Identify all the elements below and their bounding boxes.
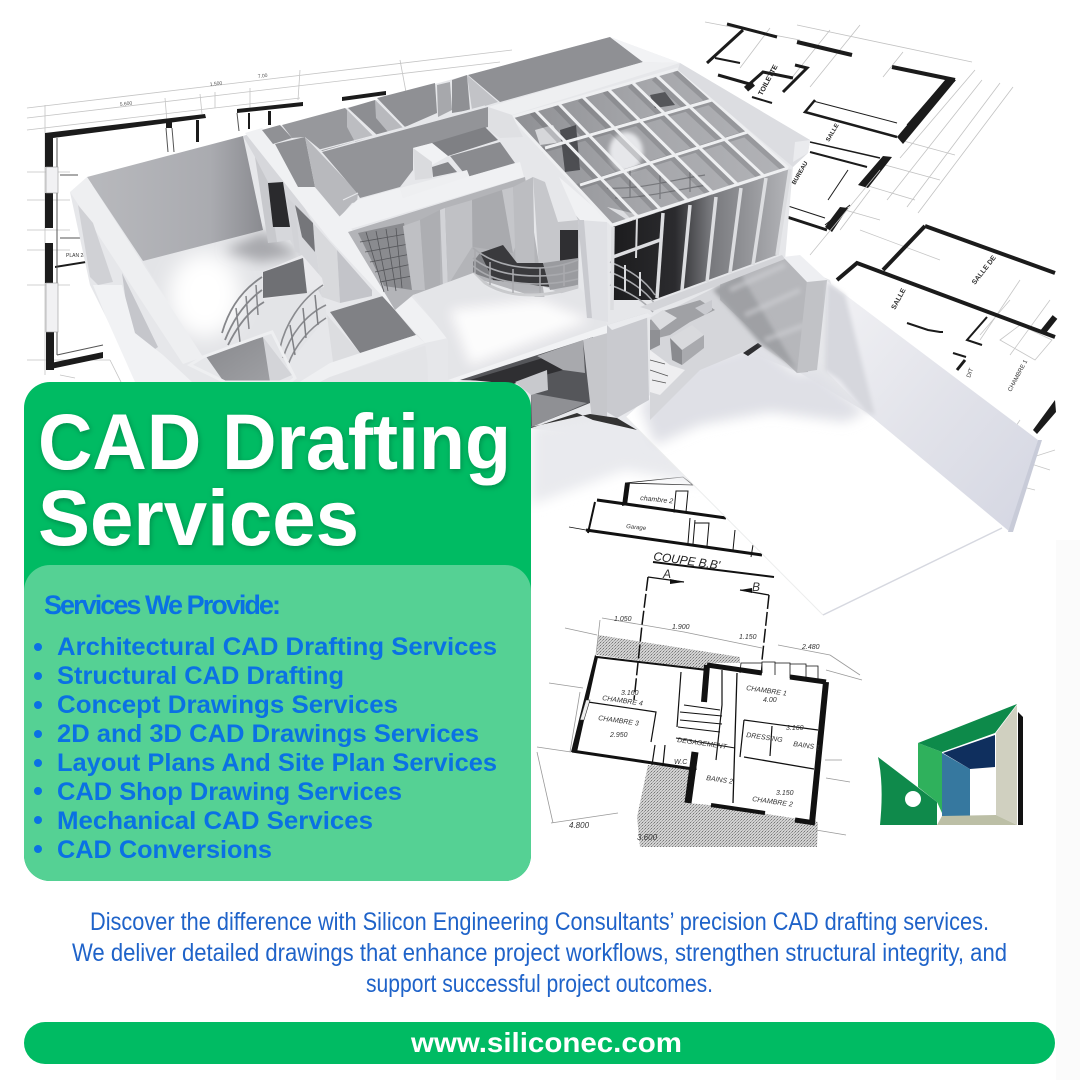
back rooms (262, 37, 680, 217)
blueprint: floor plan: 3.150 (776, 790, 794, 797)
blueprint: floor plan: DRESSING (746, 732, 783, 744)
blueprint: floor plan: 3.160 (786, 725, 804, 732)
icon: company logo (878, 704, 1023, 825)
blueprint: floor plan: CHAMBRE 3 (598, 715, 639, 728)
blueprint: right plan: SALLE DE (971, 254, 998, 286)
bullet list: Architectural CAD Drafting Services (57, 633, 497, 661)
title (38, 397, 511, 562)
blueprint: floor plan: CHAMBRE 4 (602, 695, 643, 708)
blueprint: right plan (810, 170, 1056, 490)
blueprint: right plan: CHAMBRE 1 (1007, 359, 1030, 393)
blueprint: top left plan (27, 50, 512, 400)
blueprint: floor plan: 1.900 (672, 624, 690, 631)
blueprint: top right plan: SALLE (826, 123, 841, 143)
bullet list: Layout Plans And Site Plan Services (57, 749, 497, 777)
lower centre rooms (298, 296, 448, 383)
blueprint: right plan: DIT (966, 367, 975, 379)
blueprint: top left plan: 1.500 (210, 80, 223, 88)
right block (607, 313, 652, 418)
bullet list: Concept Drawings Services (57, 691, 398, 719)
frame shadows (532, 71, 785, 219)
long right wall (825, 281, 1042, 532)
blueprint: floor plan: 4.00 (763, 697, 777, 704)
curved balcony (473, 245, 578, 295)
blueprint: floor plan: 2.950 (609, 732, 628, 739)
blueprint: floor plan: W.C (674, 759, 688, 766)
top and right bands of roof frame (488, 62, 810, 167)
left wall top and side faces (70, 177, 203, 364)
title: Services (38, 473, 359, 562)
paper floor and white sheet (531, 340, 1010, 615)
blueprint: floor plan (537, 567, 862, 847)
blueprint: top right plan (705, 22, 1013, 232)
blueprint: floor plan: 1.150 (739, 634, 757, 641)
blueprint: floor plan: 3.600 (637, 833, 658, 842)
blueprint: floor plan: 4.800 (569, 821, 590, 830)
blueprint: section B-B: COUPE B.B' (653, 549, 722, 572)
title: CAD Drafting (38, 397, 511, 486)
front pillar (578, 220, 608, 322)
panel: services list (24, 565, 531, 881)
description paragraph: support successful project outcomes. (366, 970, 713, 998)
blueprint: floor plan: BAINS 1 (793, 741, 820, 752)
blueprint: floor plan: DEGAGEMENT (677, 737, 728, 751)
blueprint: top left plan: 5.600 (120, 100, 133, 108)
panel: title card (24, 382, 531, 881)
lower small room (205, 337, 272, 382)
inner rear wall (713, 255, 827, 373)
atrium wall with columns (348, 177, 612, 310)
main floor slab (413, 273, 610, 382)
blueprint: top left plan: 7.00 (258, 73, 268, 80)
curved stair wall and railings (262, 255, 324, 300)
blueprint: floor plan: 3.160 (621, 690, 639, 697)
building footprint (70, 37, 866, 440)
front glazing (610, 169, 790, 312)
blueprint: section B-B: Garage (626, 524, 647, 532)
bullet list: 2D and 3D CAD Drawings Services (57, 720, 479, 748)
list heading: Services We Provide: (44, 590, 281, 620)
blueprint: floor plan: B (752, 580, 760, 594)
blueprint: floor plan: CHAMBRE 2 (752, 796, 793, 809)
blueprint: floor plan: BAINS 2 (706, 775, 733, 786)
under-floor void (460, 333, 637, 430)
bullet list: Mechanical CAD Services (57, 807, 373, 835)
blueprint: floor plan: 1.050 (614, 616, 632, 623)
blueprint: floor plan: A (662, 567, 671, 581)
bullet list: CAD Shop Drawing Services (57, 778, 402, 806)
bullet list (34, 633, 497, 864)
blueprint: top right plan: TOILETTE (758, 64, 780, 97)
central horizontal beam (338, 162, 524, 230)
bullet list: CAD Conversions (57, 836, 272, 864)
bullet list: Structural CAD Drafting (57, 662, 344, 690)
description paragraph (72, 908, 1007, 998)
left room (70, 130, 372, 382)
glazed roof grid (512, 69, 788, 225)
footer bar with website (24, 1022, 1055, 1064)
blueprint: section B-B (569, 477, 774, 577)
blueprint: top left plan: PLAN 20 (66, 253, 86, 259)
blueprint: floor plan: CHAMBRE 1 (746, 685, 787, 698)
footer bar with website: www.siliconec.com (410, 1027, 682, 1058)
blueprint: top right plan: BUREAU (792, 161, 810, 186)
blueprint: section B-B: chambre 2 (640, 495, 674, 505)
central diagonal wall (245, 128, 448, 343)
blueprint: right plan: SALLE (891, 287, 908, 311)
3D building model (70, 37, 1042, 615)
stair and blocks behind (650, 285, 800, 420)
blueprint: floor plan: 2.480 (801, 644, 820, 651)
